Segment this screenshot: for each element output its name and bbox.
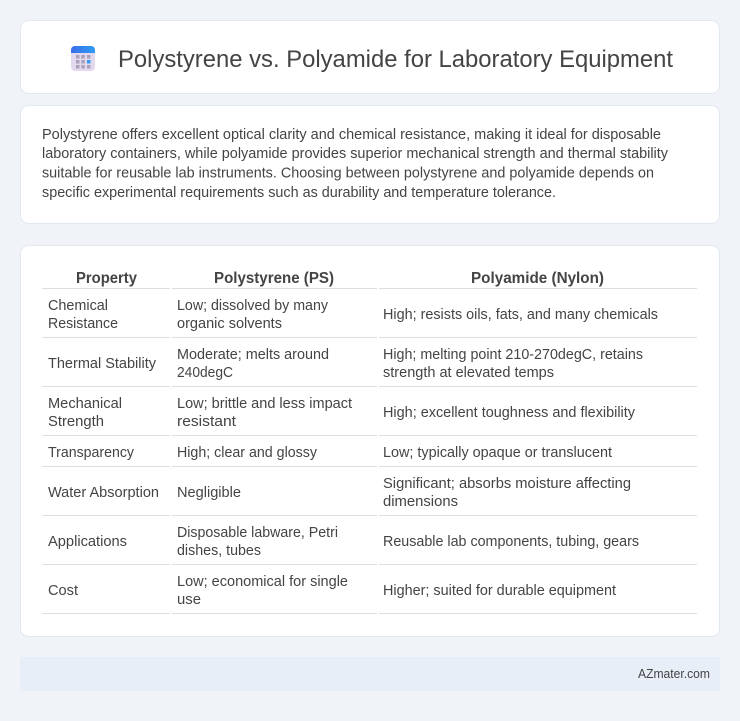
row: water absorption: [48, 476, 631, 510]
row: mechanical strength: Mechanical: [48, 396, 122, 412]
row: cost: Low; economical for single: [177, 574, 348, 590]
row: thermal stability: Thermal Stability: [48, 356, 157, 372]
row: chemical resistance: Resistance: [48, 316, 118, 332]
row: chemical resistance: High; resists oils, fats, and many chemicals: [383, 307, 658, 323]
row: water absorption: Significant; absorbs moisture affecting: [383, 476, 631, 492]
row: cost: Cost: [48, 583, 78, 599]
row: mechanical strength: High; excellent toughness and flexibility: [383, 405, 636, 421]
text block: summary: suitable for reusable lab instruments. Choosing between polystyrene and polyamide depends on: [42, 166, 654, 182]
row: mechanical strength: Low; brittle and less impact: [177, 396, 352, 412]
row: chemical resistance: Chemical: [48, 298, 108, 314]
row: applications: Disposable labware, Petri: [177, 525, 338, 541]
text block: summary: Polystyrene offers excellent optical clarity and chemical resistance, making it ideal for disposable: [42, 127, 661, 143]
row: thermal stability: High; melting point 210-270degC, retains: [383, 347, 643, 363]
text block: summary: [42, 127, 669, 201]
row: mechanical strength: [48, 396, 636, 430]
footer credit: AZmater.com: [638, 666, 710, 681]
row: thermal stability: strength at elevated temps: [383, 365, 554, 381]
row: water absorption: dimensions: [383, 494, 458, 510]
icon: calendar: [71, 46, 95, 71]
title: Polystyrene vs. Polyamide for Laboratory Equipment: [118, 46, 673, 73]
row: mechanical strength: Strength: [48, 414, 104, 430]
panel: introduction: [20, 106, 720, 224]
table header: [76, 270, 604, 287]
row: cost: [48, 574, 616, 608]
row: chemical resistance: organic solvents: [177, 316, 282, 332]
table header: Property: [76, 270, 137, 287]
text block: summary: laboratory containers, while polyamide provides superior mechanical strength and thermal stability: [42, 146, 669, 162]
row: thermal stability: 240degC: [177, 365, 233, 381]
row: transparency: Low; typically opaque or translucent: [383, 445, 612, 461]
row: applications: [48, 525, 639, 559]
row: transparency: High; clear and glossy: [177, 445, 318, 461]
row: chemical resistance: [48, 298, 658, 332]
table header: Polystyrene (PS): [214, 270, 334, 287]
row: transparency: [48, 445, 612, 461]
row: cost: use: [177, 592, 201, 608]
row: water absorption: Negligible: [177, 485, 241, 501]
row: chemical resistance: Low; dissolved by many: [177, 298, 329, 314]
row: applications: Reusable lab components, tubing, gears: [383, 534, 639, 550]
row: applications: dishes, tubes: [177, 543, 261, 559]
text block: summary: specific experimental requirements such as durability and temperature tolerance.: [42, 185, 556, 201]
footer: [20, 657, 720, 691]
row: mechanical strength: resistant: [177, 414, 236, 430]
panel: comparison table: [20, 246, 720, 636]
row: applications: Applications: [48, 534, 127, 550]
row: thermal stability: Moderate; melts around: [177, 347, 329, 363]
row: transparency: Transparency: [48, 445, 135, 461]
table header: Polyamide (Nylon): [471, 270, 604, 287]
panel: header: [20, 20, 720, 94]
row: thermal stability: [48, 347, 643, 381]
row: cost: Higher; suited for durable equipment: [383, 583, 616, 599]
row: water absorption: Water Absorption: [48, 485, 159, 501]
